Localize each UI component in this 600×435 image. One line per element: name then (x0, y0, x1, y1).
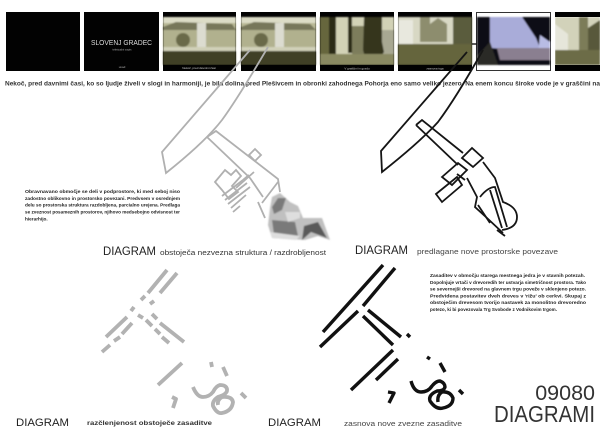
thumbnail: square with building (163, 12, 236, 71)
caption: diagram 1 (103, 246, 327, 258)
diagram: proposed spatial connections (381, 44, 517, 236)
caption: diagram 4: DIAGRAM (268, 417, 321, 429)
thumbnail: church on the square (398, 12, 472, 71)
diagram: fragmented existing greenery (102, 270, 246, 413)
text block: proposed greenery description (430, 273, 587, 312)
text block: proposed greenery description: se severnejši drevored na glavnem trgu poveže v sklenjeno potezo. (430, 286, 586, 292)
thumbnail: square with building: Nekoč, pred davnimi časi (182, 66, 216, 70)
thumbnail: Slovenj Gradec title: SLOVENJ GRADEC (91, 40, 152, 47)
text block: proposed greenery description: obstoječim drevesom tvorijo nastavek za monolitno drevoredno (430, 300, 586, 305)
caption: diagram 1: obstoječa nezvezna struktura / razdrobljenost (160, 248, 327, 257)
text block: existing space description: delu so prostorska struktura razdobljena, parcialno urejena. Predlaga (25, 202, 180, 208)
sheet title: 09080 (535, 381, 595, 405)
sheet title (494, 381, 595, 427)
diagram: new continuous greenery concept (320, 265, 463, 408)
diagram: existing disconnected structure (162, 47, 280, 218)
caption: diagram 4: zasnova nove zvezne zasaditve (344, 421, 462, 428)
text block: existing space description: Obravnavano območje se deli v podprostore, ki med seboj niso (25, 189, 180, 194)
text block: existing space description: se zveznost posameznih prostorov, njihovo medsebojno odvisnost ter (25, 210, 180, 214)
caption: diagram 4 (268, 417, 462, 429)
caption: diagram 2: predlagane nove prostorske povezave (417, 247, 558, 256)
thumbnail: church on the square: zasnova trga (426, 66, 444, 70)
thumbnail: Slovenj Gradec title: tekstualni zapis (112, 48, 132, 52)
text block: existing space description: zadostno oblikovno in prostorsko povezani. Predvsem v osrednjem (25, 196, 180, 201)
thumbnail: Slovenj Gradec title (84, 12, 159, 71)
filmstrip of thumbnails (6, 12, 600, 71)
intro sentence: Nekoč, pred davnimi časi, ko so ljudje živeli v slogi in harmoniji, je bila dolina pred Plešivcem in obronki zahodnega Pohorja eno samo veliko jezero. Na enem koncu široke vode je v graščini na (5, 80, 600, 88)
text block: proposed greenery description: potezo, ki bi povezovala Trg Svobode z Vodnikovim trgom. (430, 307, 557, 312)
text block: existing space description (25, 189, 180, 222)
text block: proposed greenery description: Zasaditev v območju starega mestnega jedra je v stavnih potezah. (430, 273, 585, 278)
thumbnail: legs in front of church (320, 12, 394, 71)
thumbnail: church, cropped at page edge (555, 12, 600, 71)
thumbnail: square with building, second view (241, 12, 316, 71)
caption: diagram 3: razčlenjenost obstoječe zasaditve (87, 420, 213, 427)
caption: diagram 2 (355, 245, 558, 257)
thumbnail: highlighted blue collage (476, 12, 550, 70)
thumbnail: legs in front of church: V graščini in gozdu (344, 66, 370, 70)
illustration: seated figure statue (268, 193, 330, 240)
thumbnail: black frame (6, 12, 80, 71)
caption: diagram 1: DIAGRAM (103, 246, 156, 258)
text block: existing space description: hierarhijo. (25, 216, 48, 222)
text block: proposed greenery description: Dopolnjuje vrtači v drevoredih ter ustvarja simetričnost prostora. Tako (430, 280, 586, 285)
caption: diagram 3 (16, 417, 213, 429)
caption: diagram 3: DIAGRAM (16, 417, 69, 429)
thumbnail: Slovenj Gradec title: uvod (119, 65, 126, 69)
text block: proposed greenery description: Predvidena postavitev dveh dreves v 'rižu' ob cerkvi. Skupaj z (430, 294, 587, 298)
caption: diagram 2: DIAGRAM (355, 245, 408, 257)
